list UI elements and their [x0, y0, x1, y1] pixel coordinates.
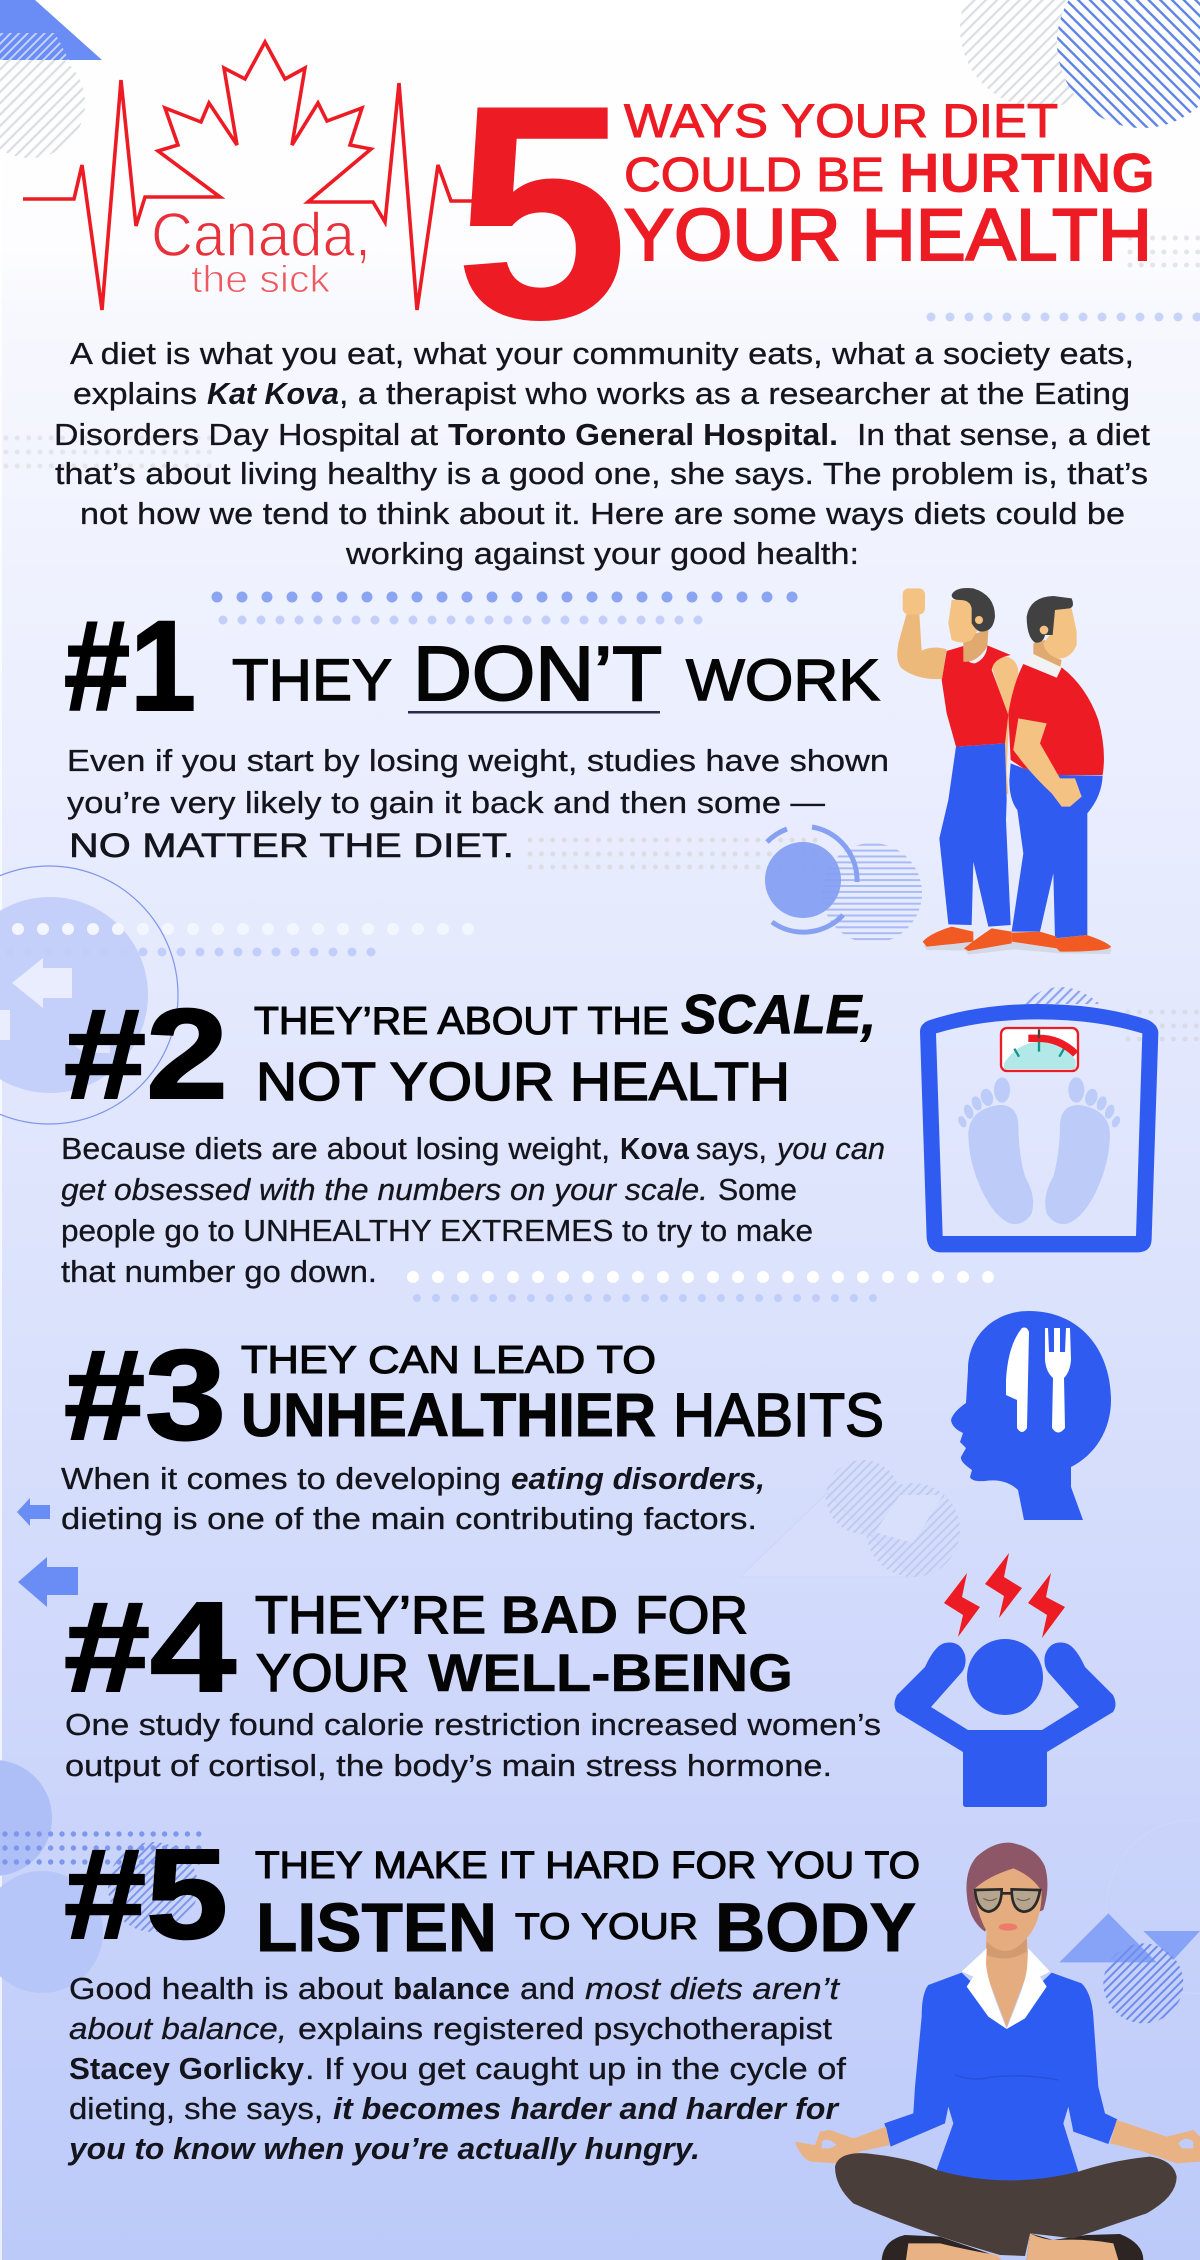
heading emphasis unhealthier: UNHEALTHIER	[241, 1381, 656, 1449]
heading work: WORK	[686, 648, 880, 713]
right foot shoe	[1027, 2233, 1143, 2260]
title line 1: WAYS YOUR DIET	[624, 94, 1058, 147]
title	[454, 41, 1155, 383]
body text 5: Stacey Gorlicky	[69, 2051, 305, 2086]
knife	[1006, 1328, 1029, 1432]
body text 5: dieting, she says,	[69, 2091, 323, 2126]
body text 5	[67, 1971, 846, 2166]
heading line 1: THEY CAN LEAD TO	[241, 1339, 656, 1382]
lightning bolts	[944, 1553, 1065, 1638]
head	[967, 1639, 1043, 1715]
title emphasis hurting: HURTING	[899, 141, 1155, 204]
collar right	[1007, 1948, 1050, 2029]
man 2 hair	[1027, 596, 1073, 643]
decoration: triangles and hatched circle beside woman	[1059, 1820, 1200, 2023]
heading your: YOUR	[256, 1644, 409, 1703]
heading habits: HABITS	[673, 1381, 884, 1449]
icon: stressed person with lightning bolts	[894, 1553, 1116, 1807]
intro paragraph: that’s about living healthy is a good one, she says. The problem is, that’s	[55, 456, 1148, 491]
crossed legs	[835, 2153, 1177, 2256]
body text 5: balance	[393, 1971, 510, 2006]
heading emphasis scale: SCALE,	[681, 983, 876, 1045]
man 1 shoes	[923, 927, 1012, 951]
heading to your: TO YOUR	[515, 1906, 698, 1947]
body text 2: says,	[696, 1131, 767, 1166]
body text 5: and	[520, 1971, 575, 2006]
man 2 arm	[1013, 718, 1082, 807]
intro paragraph: Disorders Day Hospital at	[54, 417, 438, 452]
title line 3: YOUR HEALTH	[624, 195, 1152, 276]
man 1 raised arm	[897, 613, 947, 679]
heading line 1: THEY MAKE IT HARD FOR YOU TO	[255, 1845, 920, 1887]
icon: head with knife and fork	[951, 1311, 1111, 1520]
section 4: well-being	[64, 1576, 881, 1783]
man 2 face	[1043, 608, 1077, 658]
decoration: large left circle with arrows	[0, 866, 178, 1124]
icon: bathroom scale	[920, 1004, 1158, 1252]
body text 3: When it comes to developing	[61, 1461, 501, 1496]
body text 2: get obsessed with the numbers on your scale.	[61, 1172, 708, 1207]
number 3: #3	[64, 1324, 226, 1467]
section 1: they don't work	[64, 595, 889, 865]
body text 1: Even if you start by losing weight, studies have shown	[67, 743, 889, 778]
intro paragraph: explains	[73, 376, 197, 411]
body text 2: you can	[775, 1131, 885, 1166]
glasses	[975, 1889, 1040, 1912]
right footprint	[1045, 1077, 1122, 1224]
man 1 back arm	[988, 657, 1018, 796]
left footprint	[956, 1077, 1033, 1224]
waist crease	[955, 2075, 1058, 2080]
intro paragraph: not how we tend to think about it. Here are some ways diets could be	[80, 496, 1125, 531]
body text 2: Kova	[620, 1131, 690, 1166]
intro paragraph: , a therapist who works as a researcher at the Eating	[339, 376, 1130, 411]
heading don't: DON’T	[413, 631, 662, 717]
heading for: FOR	[635, 1586, 748, 1645]
man 1 shirt	[942, 645, 1011, 747]
man 1 hair	[952, 588, 995, 632]
heading underline	[408, 711, 660, 714]
body text 2: people go to UNHEALTHY EXTREMES to try to make	[61, 1213, 813, 1248]
decoration: circles and dots near section 5	[0, 1760, 209, 1993]
hair	[966, 1843, 1047, 1932]
body text 4	[65, 1707, 881, 1783]
decoration: dot rows top	[6, 238, 1200, 466]
neck	[985, 1930, 1028, 2027]
heading line 2: NOT YOUR HEALTH	[256, 1052, 790, 1112]
body text 2: that number go down.	[61, 1254, 377, 1289]
intro paragraph: In that sense, a diet	[857, 417, 1150, 452]
logo tagline: the sick	[191, 259, 331, 301]
intro paragraph: working against your good health:	[345, 536, 859, 571]
number 4: #4	[64, 1576, 236, 1719]
right forearm and hand	[1110, 2120, 1200, 2163]
intro paragraph	[54, 336, 1150, 571]
intro paragraph: A diet is what you eat, what your community eats, what a society eats,	[70, 336, 1134, 371]
scale dial	[1001, 1028, 1078, 1071]
heading they: THEY	[232, 648, 392, 713]
body text 1: you’re very likely to gain it back and then some —	[67, 785, 825, 820]
body text 5: . If you get caught up in the cycle of	[305, 2051, 846, 2086]
body text 4: One study found calorie restriction increased women’s	[65, 1707, 881, 1742]
body text 1	[67, 743, 889, 865]
body text 5: Good health is about	[69, 1971, 383, 2006]
man 1 neck	[963, 630, 988, 662]
section 3: unhealthier habits	[61, 1324, 884, 1536]
number 2: #2	[64, 983, 228, 1126]
illustration: two men	[897, 588, 1112, 955]
section 2: about the scale	[61, 983, 885, 1289]
decoration: top left triangle and circle	[0, 0, 102, 158]
body text 5: it becomes harder and harder for	[333, 2091, 840, 2126]
logo: Canada, the sick	[23, 42, 473, 310]
left foot skin	[906, 2243, 1002, 2260]
title line 2: COULD BE	[624, 149, 884, 202]
neck shadow	[987, 1938, 1027, 1958]
collar left	[962, 1948, 1007, 2029]
body text 5: you to know when you’re actually hungry.	[67, 2131, 700, 2166]
illustration: meditating woman	[795, 1843, 1200, 2260]
decoration: top right hatched circles	[960, 0, 1200, 128]
section 5: listen to your body	[64, 1823, 920, 2166]
body text 2	[61, 1131, 885, 1289]
body text 2: Some	[718, 1172, 797, 1207]
title numeral 5: 5	[454, 41, 629, 383]
decoration: circles and arcs beside section 1	[530, 827, 922, 943]
icon: maple leaf heartbeat line	[23, 42, 473, 310]
man 2 pants	[1009, 763, 1103, 938]
man 1 pants	[939, 743, 1011, 927]
man 2 ear	[1040, 626, 1048, 634]
man 2 shoes	[1012, 932, 1111, 952]
jacket	[884, 1973, 1117, 2184]
face	[973, 1868, 1042, 1947]
body text 3	[61, 1461, 765, 1536]
shoe shadows	[923, 942, 1112, 955]
heading bad: BAD	[501, 1586, 618, 1645]
man 2 shirt	[1008, 664, 1104, 775]
heading they're: THEY’RE	[255, 1586, 486, 1645]
left forearm and hand	[795, 2127, 890, 2163]
logo wordmark: Canada,	[151, 201, 371, 270]
body text 3: eating disorders,	[511, 1461, 765, 1496]
lips	[999, 1923, 1017, 1931]
decoration: blue arrows	[17, 1498, 78, 1607]
scale frame	[920, 1004, 1158, 1252]
heading well-being: WELL-BEING	[428, 1644, 793, 1703]
heading line 1: THEY’RE ABOUT THE	[254, 1000, 669, 1043]
number 1: #1	[64, 595, 196, 738]
man 2 collar	[1024, 654, 1062, 678]
decoration: dot rows above section 2	[10, 929, 477, 952]
intro paragraph: Kat Kova	[207, 376, 339, 411]
right foot skin	[1027, 2233, 1118, 2260]
body text 2: Because diets are about losing weight,	[61, 1131, 610, 1166]
decoration: faint triangle and hatched circles	[740, 1460, 960, 1577]
left foot shoe	[882, 2235, 1000, 2260]
fork	[1045, 1328, 1071, 1432]
body text 5: about balance,	[69, 2011, 287, 2046]
body text 4: output of cortisol, the body’s main stress hormone.	[65, 1748, 832, 1783]
decoration: dot rows above section 1	[217, 597, 808, 620]
heading body: BODY	[715, 1889, 916, 1966]
number 5: #5	[64, 1823, 228, 1966]
heading listen: LISTEN	[256, 1889, 497, 1966]
decoration: hatch and dots around scale	[1022, 987, 1200, 1039]
body and arms	[894, 1642, 1116, 1807]
intro paragraph: Toronto General Hospital.	[448, 417, 838, 452]
body text 3: dieting is one of the main contributing factors.	[61, 1501, 757, 1536]
man 1 fist	[903, 588, 925, 614]
body text 5: explains registered psychotherapist	[298, 2011, 832, 2046]
body text 5: most diets aren’t	[585, 1971, 841, 2006]
decoration: dot rows below section 2	[413, 1277, 992, 1298]
body text 1: NO MATTER THE DIET.	[69, 827, 514, 865]
man 1 ear	[975, 616, 983, 624]
man 2 neck	[1033, 640, 1062, 668]
man 1 face	[948, 598, 982, 642]
